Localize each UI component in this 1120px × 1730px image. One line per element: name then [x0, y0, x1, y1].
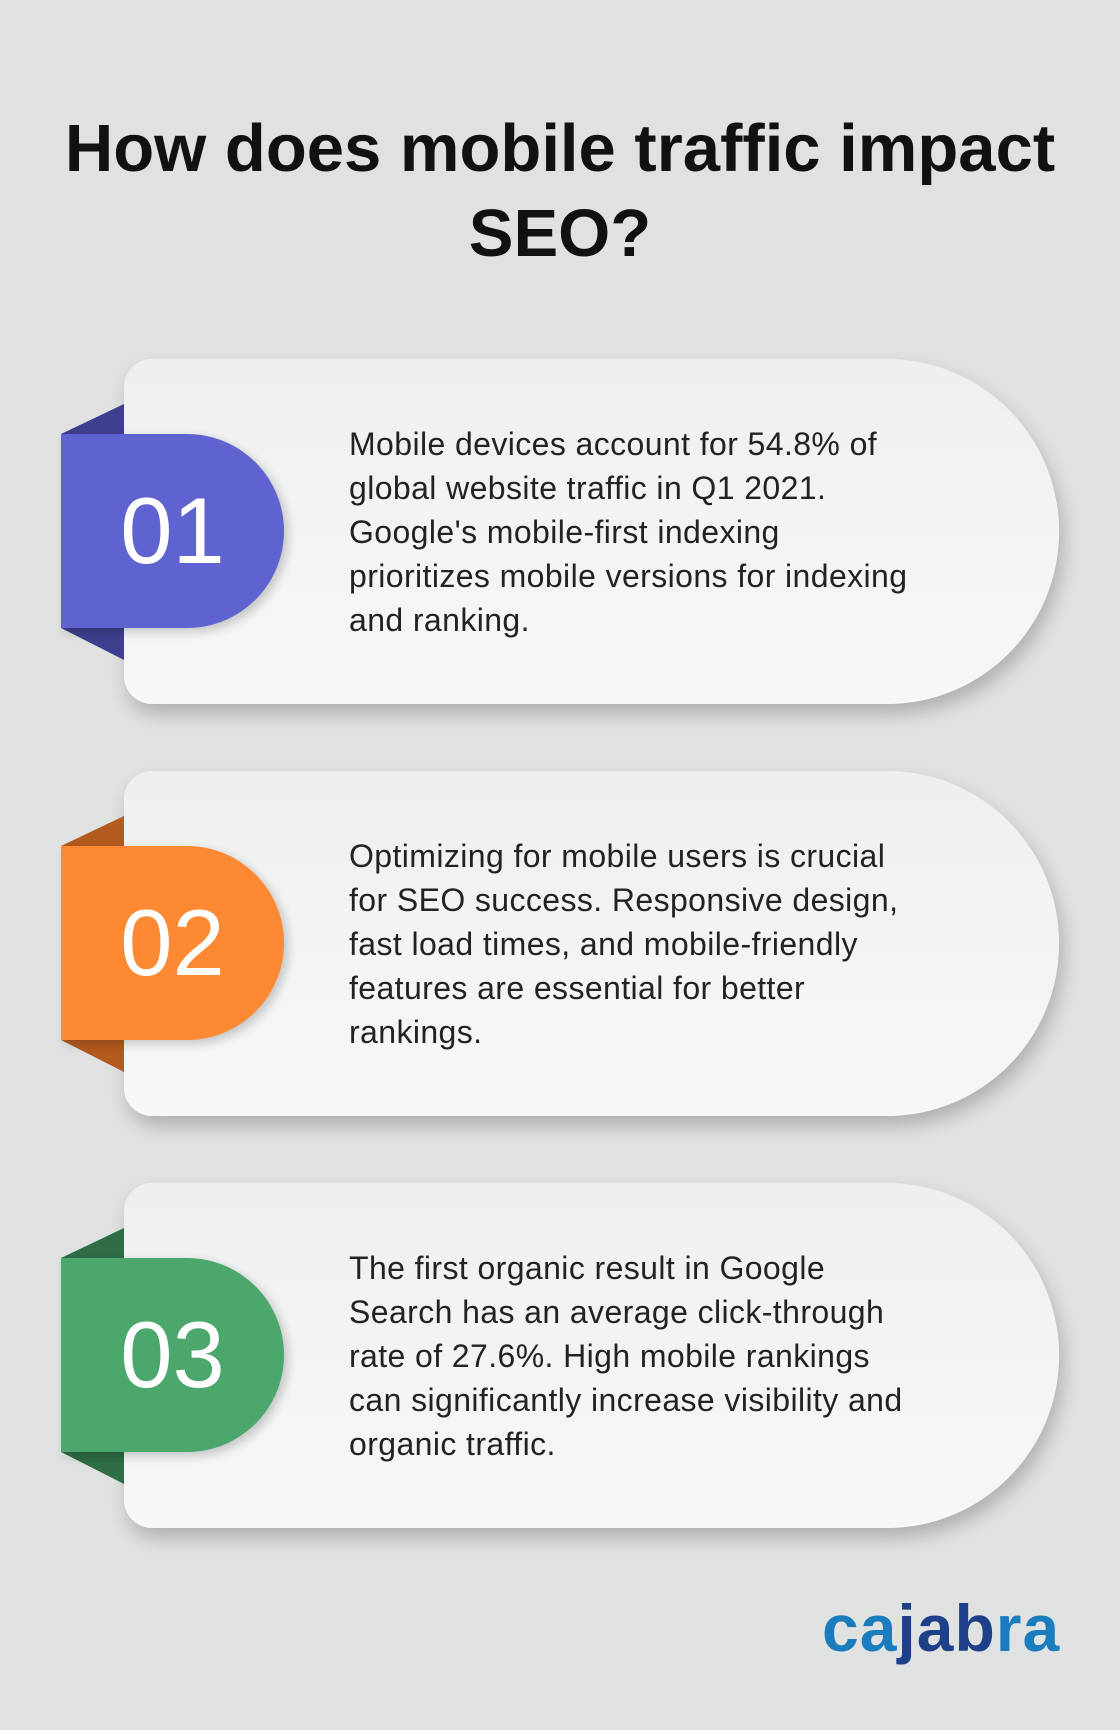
- fold 2: [61, 816, 124, 1072]
- panel: item 2: [61, 771, 1071, 1134]
- text 1: and ranking.: [349, 602, 530, 638]
- text 3: organic traffic.: [349, 1426, 556, 1462]
- text 2: fast load times, and mobile-friendly: [349, 926, 858, 962]
- text 2: [349, 838, 898, 1050]
- logo: cajabra: [822, 1591, 1060, 1665]
- text 3: [349, 1250, 903, 1462]
- title: How does mobile traffic impact: [65, 111, 1055, 186]
- text 2: for SEO success. Responsive design,: [349, 882, 898, 918]
- text 3: The first organic result in Google: [349, 1250, 825, 1286]
- panel: item 1: [61, 359, 1071, 722]
- card 1: [124, 359, 1059, 704]
- card 2: [124, 771, 1059, 1116]
- fold 3: [61, 1228, 124, 1484]
- badge 03: [61, 1258, 284, 1452]
- fold 1: [61, 404, 124, 660]
- card 3: [124, 1183, 1059, 1528]
- panel: item 3: [61, 1183, 1071, 1546]
- text 1: prioritizes mobile versions for indexing: [349, 558, 907, 594]
- badge 02: 02: [120, 890, 225, 995]
- title: [65, 111, 1055, 271]
- text 1: Mobile devices account for 54.8% of: [349, 426, 877, 462]
- text 1: global website traffic in Q1 2021.: [349, 470, 826, 506]
- text 1: [349, 426, 907, 638]
- badge 01: 01: [120, 478, 225, 583]
- text 3: Search has an average click-through: [349, 1294, 884, 1330]
- text 2: Optimizing for mobile users is crucial: [349, 838, 885, 874]
- text 2: rankings.: [349, 1014, 482, 1050]
- text 2: features are essential for better: [349, 970, 805, 1006]
- text 1: Google's mobile-first indexing: [349, 514, 780, 550]
- text 3: rate of 27.6%. High mobile rankings: [349, 1338, 870, 1374]
- title: SEO?: [469, 196, 651, 271]
- badge 02: [61, 846, 284, 1040]
- badge 03: 03: [120, 1302, 225, 1407]
- badge 01: [61, 434, 284, 628]
- text 3: can significantly increase visibility and: [349, 1382, 903, 1418]
